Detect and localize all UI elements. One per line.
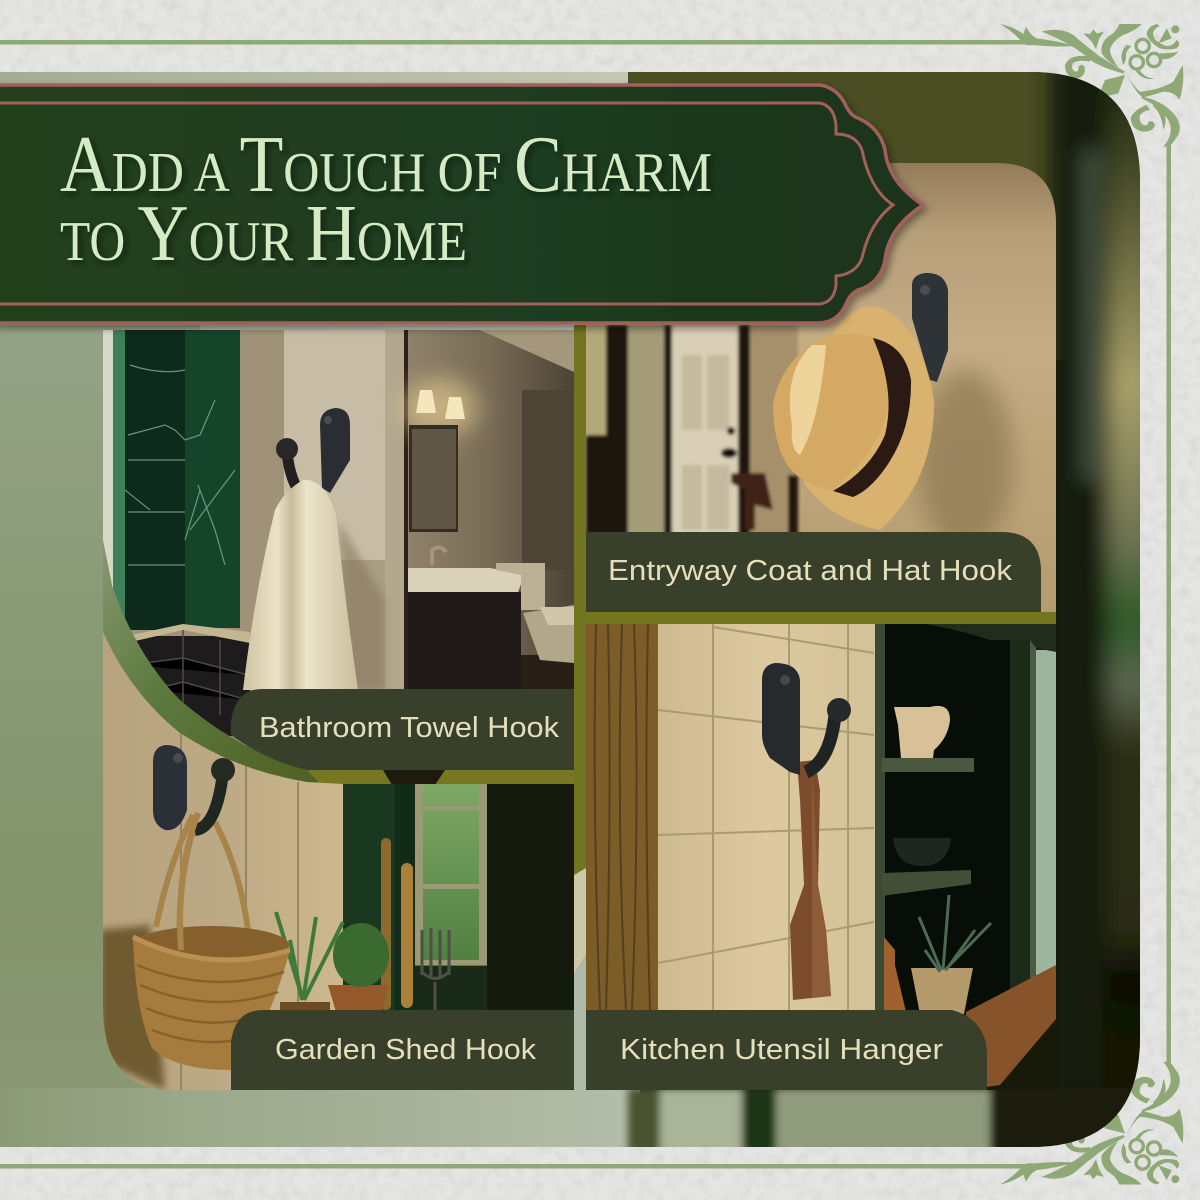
label: garden shed hook xyxy=(231,1010,574,1090)
pitcher xyxy=(894,706,950,758)
wooden counter xyxy=(966,965,1056,1090)
label: garden shed hook: Garden Shed Hook xyxy=(275,1034,537,1066)
label: entryway coat and hat hook: Entryway Coat and Hat Hook xyxy=(608,555,1013,587)
potted plant xyxy=(911,895,991,1014)
photo: entryway coat and hat hook xyxy=(586,163,1056,612)
towel xyxy=(243,480,358,690)
sink and faucet xyxy=(408,547,525,597)
potted plants xyxy=(276,912,389,1015)
label: kitchen utensil hanger: Kitchen Utensil Hanger xyxy=(620,1034,943,1066)
ornament: top right corner xyxy=(1000,24,1183,147)
label: bathroom towel hook: Bathroom Towel Hook xyxy=(259,712,560,744)
label: kitchen utensil hanger xyxy=(586,1010,987,1090)
wall lamps xyxy=(416,390,465,419)
bowl xyxy=(893,838,951,866)
hat xyxy=(773,306,934,530)
cutting board xyxy=(884,937,906,1012)
ornament: bottom right corner xyxy=(1000,1062,1183,1185)
title xyxy=(60,121,712,278)
basket xyxy=(133,813,290,1070)
photo: bathroom towel hook xyxy=(103,330,574,770)
label: bathroom towel hook xyxy=(231,689,574,770)
towel shadow xyxy=(338,520,385,690)
photo: kitchen utensil hanger xyxy=(586,624,1056,1090)
garden tools xyxy=(381,838,449,1010)
title: ADD A TOUCH OF CHARM xyxy=(60,121,712,209)
icon: iron hook xyxy=(762,663,851,775)
mirror xyxy=(409,425,458,532)
spatula xyxy=(790,760,831,1000)
basket shadow xyxy=(100,925,165,1090)
icon: iron hook xyxy=(276,408,350,497)
icon: iron hook xyxy=(912,273,948,382)
green curved band between photos xyxy=(103,520,320,784)
vanity cabinet xyxy=(408,592,521,690)
icon: iron hook xyxy=(153,745,235,950)
toilet xyxy=(496,563,574,663)
photo: garden shed hook xyxy=(100,620,574,1090)
title banner xyxy=(0,85,923,323)
label: entryway coat and hat hook xyxy=(586,532,1041,612)
title: TO YOUR HOME xyxy=(60,190,467,278)
